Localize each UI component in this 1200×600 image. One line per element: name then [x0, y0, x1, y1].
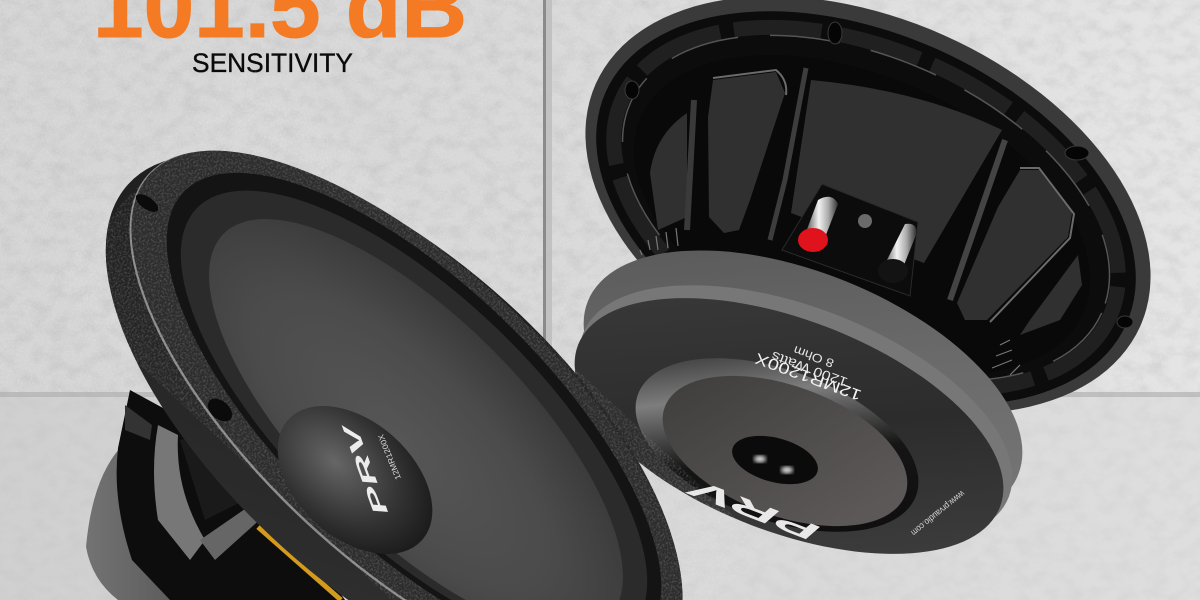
felt cone back: [650, 72, 1082, 335]
frame mounting notch lower: [203, 394, 237, 426]
frame highlight line: [48, 66, 764, 600]
model label on dust cap: 12MR1200X: [376, 432, 403, 481]
background: concrete wall: [0, 0, 1200, 398]
black terminal: [878, 224, 916, 283]
textured gasket: [50, 66, 764, 600]
red terminal: [798, 197, 838, 252]
mounting holes: [625, 22, 1133, 328]
website label: www.prvaudio.com: [909, 488, 967, 538]
frame mounting notch upper: [133, 191, 161, 215]
pole recess: [612, 324, 942, 566]
dust cap: [249, 377, 461, 583]
black inner ring: [94, 98, 734, 600]
spoke highlights: [687, 68, 1074, 322]
subtitle: sensitivity: SENSITIVITY: [192, 48, 353, 78]
vent hole: [727, 427, 823, 493]
model label: 12MR1200X: [752, 349, 864, 403]
terminal cooling fins: [640, 228, 1020, 375]
frame channel windows: [558, 0, 1174, 461]
magnet grey band: [545, 194, 1061, 582]
PRV logo on dust cap: PRV: [338, 418, 393, 518]
speaker: rear view (right): [520, 0, 1200, 496]
surround: [112, 120, 716, 600]
power label: 1200 Watts: [769, 348, 850, 390]
magnet assembly with labels: [540, 194, 1061, 600]
speaker: front view (left): [17, 61, 771, 600]
frame channel highlights: [569, 0, 1163, 450]
PRV logo on plate: PRV: [682, 471, 823, 547]
inner basket: [585, 0, 1139, 439]
speaker frame outer rim: [520, 0, 1200, 496]
magnet plate: [540, 246, 1038, 600]
terminal block: [782, 184, 918, 296]
pole piece: [642, 346, 928, 556]
background: concrete floor: [0, 392, 1200, 600]
frame channel: [535, 0, 1197, 483]
cone: [147, 157, 685, 600]
frame side wall: [17, 61, 771, 600]
rear magnet and basket: [86, 390, 345, 600]
impedance label: 8 Ohm: [792, 343, 836, 371]
magnet lip: [544, 232, 1048, 598]
